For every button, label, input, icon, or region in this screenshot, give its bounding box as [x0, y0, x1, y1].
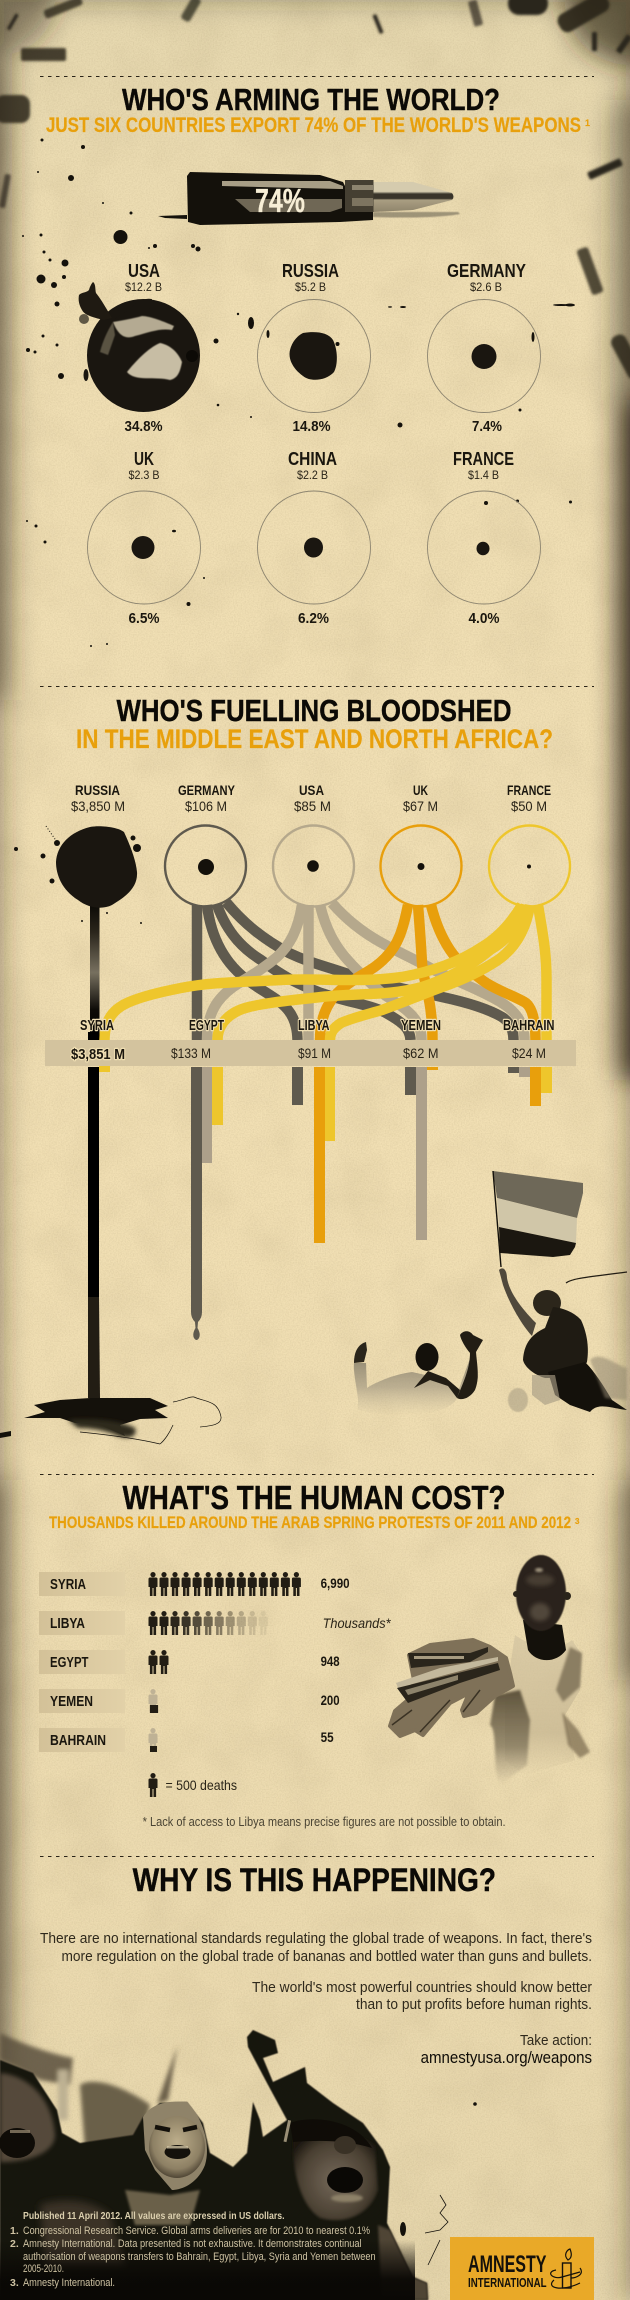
- exporter labels: RUSSIA: [75, 782, 120, 798]
- illustration: child holding bullets: [390, 1555, 590, 1785]
- value France: $1.4 B: [468, 468, 499, 482]
- woman in headscarf: [125, 2102, 207, 2225]
- value UK: $2.3 B: [128, 468, 160, 482]
- text block: explanation: more regulation on the global trade of bananas and bottled water than guns and bullets.: [62, 1948, 592, 1965]
- title: why is this happening: WHY IS THIS HAPPENING?: [133, 1862, 496, 1898]
- logo subline: INTERNATIONAL: [468, 2276, 547, 2290]
- call to action link: amnestyusa.org/weapons: [421, 2048, 592, 2067]
- flow chart: exporters to importers: [14, 782, 576, 1340]
- exporter circle: france: [489, 826, 570, 906]
- right face: [284, 2119, 428, 2300]
- label Germany: GERMANY: [447, 261, 526, 281]
- importer totals: [71, 1045, 546, 1063]
- streams: germany: [197, 902, 514, 1040]
- value China: $2.2 B: [297, 468, 328, 482]
- exporter labels: FRANCE: [507, 782, 551, 798]
- background crowd: [0, 2033, 177, 2150]
- value Germany: $2.6 B: [470, 280, 502, 294]
- title: who's fuelling bloodshed: WHO'S FUELLING BLOODSHED: [116, 693, 512, 728]
- child head: [513, 1555, 571, 1660]
- exporter labels: $106 M: [185, 798, 227, 814]
- publication note: Published 11 April 2012. All values are expressed in US dollars.: [23, 2210, 285, 2222]
- footnotes: 2.: [10, 2238, 19, 2250]
- bars: syria: [88, 1067, 99, 1298]
- footnotes: 2005-2010.: [23, 2263, 64, 2275]
- text block: explanation: The world's most powerful countries should know better: [252, 1979, 592, 1996]
- ink splatter: scattered dots: [22, 138, 575, 647]
- ring UK: [88, 491, 200, 604]
- streams: france: [104, 905, 546, 1040]
- text block: explanation: than to put profits before human rights.: [356, 1996, 592, 2013]
- label UK: UK: [134, 449, 154, 469]
- share France: 4.0%: [468, 611, 500, 627]
- hand: [390, 1640, 513, 1736]
- row: egypt: EGYPT: [50, 1655, 89, 1671]
- exporter circle: usa: [273, 826, 354, 906]
- row: yemen: [39, 1689, 340, 1713]
- label France: FRANCE: [453, 449, 514, 469]
- row: libya: [39, 1611, 391, 1635]
- importer totals: $24 M: [512, 1045, 546, 1061]
- child shadowed side and sleeve: [490, 1647, 590, 1785]
- exporter labels: USA: [299, 782, 324, 798]
- footnotes: Congressional Research Service. Global arms deliveries are for 2010 to nearest 0.1%: [23, 2225, 370, 2237]
- finger creases: [392, 1690, 480, 1732]
- share USA: 34.8%: [124, 419, 163, 435]
- blob China: [304, 538, 323, 558]
- share Russia: 14.8%: [292, 419, 331, 435]
- syria stream above band: [88, 1032, 99, 1040]
- importer total band: [45, 1040, 576, 1066]
- ink marks lower right: [400, 2102, 477, 2265]
- icon: candle and barbed wire: [551, 2249, 581, 2288]
- panel: UK: [88, 449, 200, 627]
- blob Russia: [290, 332, 337, 380]
- row: syria: SYRIA: [50, 1577, 86, 1593]
- section divider: [40, 76, 594, 78]
- bars: libya: [292, 1067, 335, 1243]
- footnotes: 3.: [10, 2277, 19, 2289]
- footnotes: 1.: [10, 2225, 19, 2237]
- row: libya: LIBYA: [50, 1616, 85, 1632]
- label China: CHINA: [288, 449, 337, 469]
- section divider: [40, 1856, 594, 1858]
- title: who's arming the world: WHO'S ARMING THE WORLD?: [122, 82, 500, 117]
- importer labels: YEMEN: [401, 1018, 441, 1034]
- streams: uk: [320, 905, 536, 1040]
- exporter labels: GERMANY: [178, 782, 236, 798]
- icon: bullet 74%: [158, 172, 460, 225]
- panel: Russia: [258, 261, 370, 435]
- value Russia: $5.2 B: [295, 280, 326, 294]
- value USA: $12.2 B: [125, 280, 162, 294]
- exporter labels: $3,850 M: [71, 798, 125, 814]
- label Russia: RUSSIA: [282, 261, 339, 281]
- ring Germany: [428, 300, 540, 412]
- blob France: [476, 542, 490, 555]
- importer labels: SYRIA: [80, 1018, 114, 1034]
- row: bahrain: BAHRAIN: [50, 1733, 106, 1749]
- importer totals: $91 M: [298, 1045, 331, 1061]
- exporter circle: germany: [165, 826, 246, 906]
- bullet label: 74%: [255, 182, 305, 219]
- label USA: USA: [128, 261, 160, 281]
- title: what's the human cost: WHAT'S THE HUMAN COST?: [122, 1479, 506, 1516]
- row: egypt: [39, 1650, 340, 1674]
- share Germany: 7.4%: [472, 419, 502, 435]
- exporter labels: UK: [413, 782, 428, 798]
- illustration: raised arms figure: [354, 1331, 483, 1415]
- left face: [0, 2073, 55, 2162]
- logo wordmark: AMNESTY: [468, 2251, 546, 2278]
- russia splatter: [14, 826, 142, 924]
- ring China: [258, 491, 370, 604]
- blob Germany: [472, 344, 496, 369]
- row: yemen: 200: [321, 1692, 340, 1708]
- illustration: flag bearer: [493, 1171, 627, 1412]
- footnote mark 3: 3: [575, 1517, 580, 1526]
- bars: yemen: [405, 1067, 438, 1240]
- bars: bahrain: [508, 1067, 552, 1106]
- importer labels: [80, 1018, 554, 1034]
- row: yemen: YEMEN: [50, 1694, 93, 1710]
- row: libya: Thousands*: [323, 1615, 391, 1631]
- panel: USA: [79, 261, 200, 435]
- silhouette: [0, 2030, 428, 2300]
- footnote: libya: * Lack of access to Libya means precise figures are not possible to obtain.: [143, 1815, 506, 1829]
- importer labels: BAHRAIN: [503, 1018, 554, 1034]
- row: syria: 6,990: [321, 1575, 350, 1591]
- text block: explanation: [40, 1930, 592, 2049]
- photo: protesters: [0, 2030, 428, 2300]
- importer totals: $133 M: [171, 1045, 211, 1061]
- exporter labels: $67 M: [403, 798, 438, 814]
- share UK: 6.5%: [128, 611, 160, 627]
- share China: 6.2%: [298, 611, 329, 627]
- blob UK: [132, 536, 154, 559]
- exporter labels: $50 M: [511, 798, 547, 814]
- panel: China: [258, 449, 370, 627]
- blob USA: [79, 282, 200, 412]
- left shoulder: [40, 2201, 125, 2265]
- row: egypt: 948: [321, 1653, 340, 1669]
- footnotes: Amnesty International.: [23, 2277, 115, 2289]
- bullets in hand: [396, 1647, 500, 1703]
- text block: explanation: Take action:: [520, 2032, 592, 2049]
- pictogram chart: deaths per country: [39, 1572, 391, 1797]
- section divider: [40, 1474, 594, 1476]
- footnotes: authorisation of weapons transfers to Bahrain, Egypt, Libya, Syria and Yemen between: [23, 2251, 376, 2263]
- bottom fade: [0, 2240, 415, 2300]
- logo: amnesty international: [450, 2237, 594, 2300]
- footnote mark 1: 1: [585, 118, 590, 128]
- bars: egypt: [191, 1067, 223, 1340]
- row: syria: [39, 1572, 350, 1596]
- importer labels: LIBYA: [298, 1018, 330, 1034]
- ring Russia: [258, 300, 370, 412]
- footnotes: [10, 2225, 376, 2289]
- exporter circle: russia blob: [56, 826, 137, 908]
- panel: Germany: [428, 261, 540, 435]
- exporter circle: uk: [380, 826, 462, 906]
- importer labels: EGYPT: [189, 1018, 224, 1034]
- russia stem: [90, 905, 100, 1040]
- row: bahrain: [39, 1728, 334, 1752]
- row: bahrain: 55: [321, 1729, 334, 1745]
- flag: [493, 1171, 583, 1267]
- exporter labels: $85 M: [294, 798, 331, 814]
- section divider: [40, 686, 594, 688]
- footnotes: Amnesty International. Data presented is not exhaustive. It demonstrates continual: [23, 2238, 362, 2250]
- importer totals: $62 M: [403, 1045, 438, 1061]
- importer totals: $3,851 M: [71, 1047, 125, 1063]
- oil pool at the foot of the syria bar: [0, 1297, 221, 1444]
- text block: explanation: There are no international standards regulating the global trade of weapons. In fact, there's: [40, 1930, 592, 1947]
- syria stub: [99, 1040, 110, 1072]
- ring France: [428, 491, 540, 604]
- child shirt: [505, 1635, 582, 1775]
- panel: France: [428, 449, 540, 627]
- exporter labels: [71, 782, 551, 814]
- flag bearer figure: [499, 1268, 627, 1412]
- streams: usa: [207, 903, 524, 1040]
- debris: shell casings around the edge: [0, 0, 630, 382]
- legend: = 500 deaths: [166, 1777, 237, 1793]
- legend: [148, 1773, 237, 1797]
